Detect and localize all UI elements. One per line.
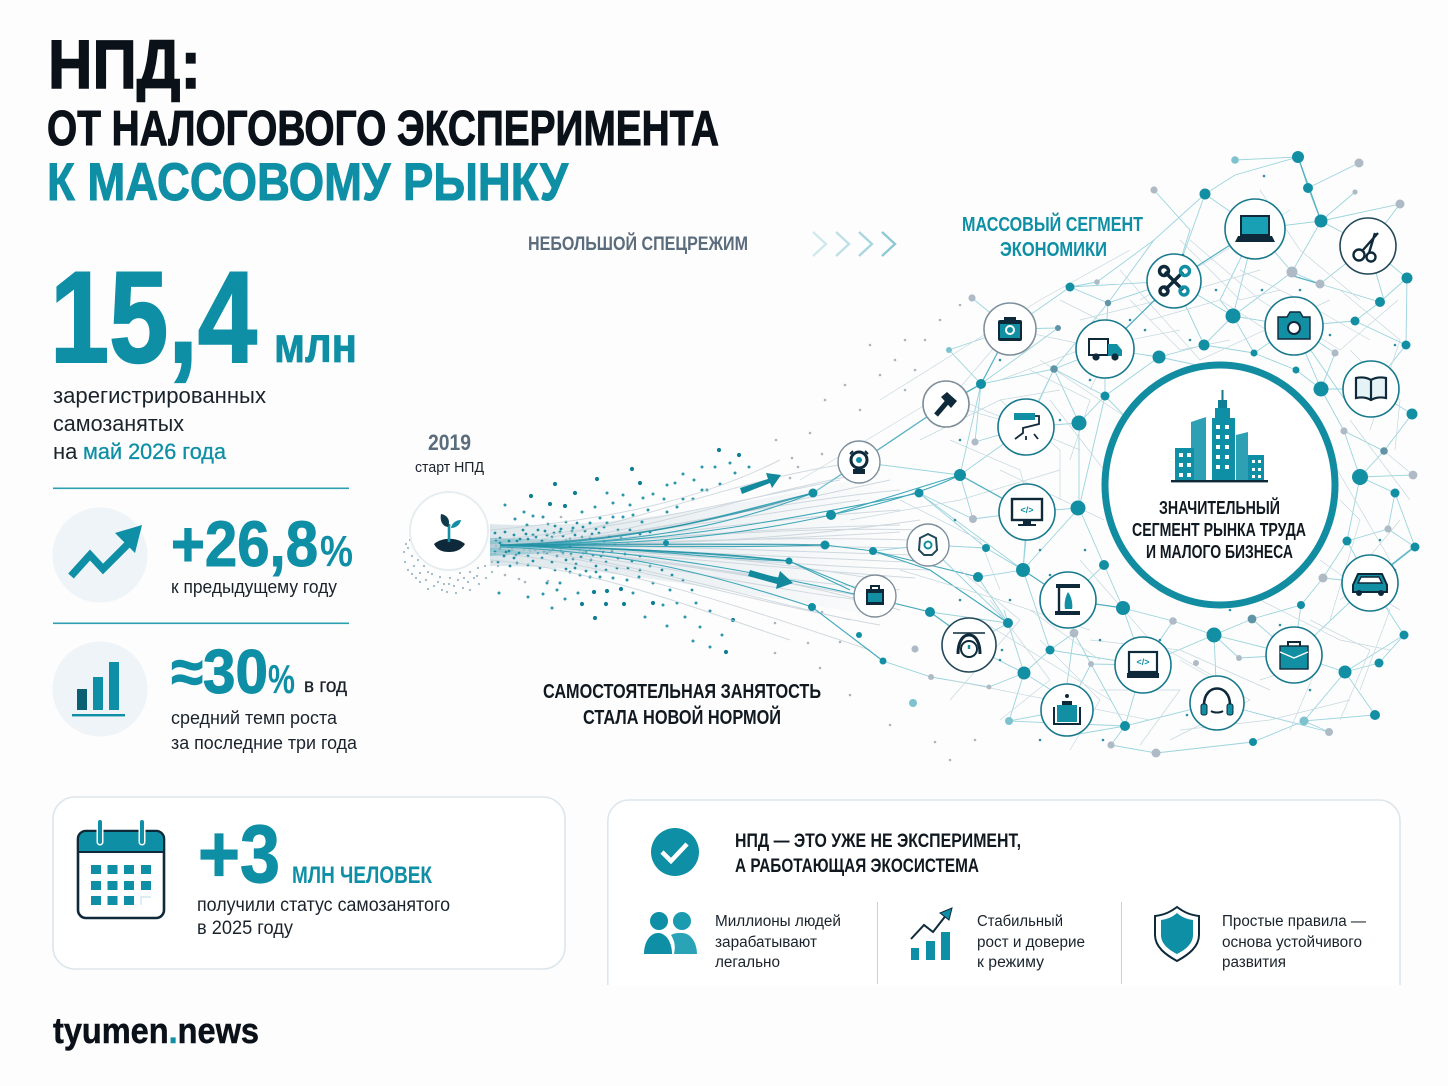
caption: self-employment new norm [543, 680, 821, 729]
big stat 15,4 mln: зарегистрированных [53, 383, 266, 408]
icon: car [1342, 555, 1398, 611]
panel: +3 million: +3 [198, 809, 280, 900]
stat: +26,8%: % [320, 527, 353, 576]
flow arrows [740, 473, 793, 589]
panel: ecosystem: Стабильный [977, 913, 1063, 930]
network nodes [663, 151, 1420, 758]
icon: printer press [1040, 572, 1096, 628]
icon: old camera [984, 303, 1036, 355]
flow: particles from start point [404, 305, 975, 760]
panel: ecosystem: основа устойчивого [1222, 934, 1362, 951]
panel: ecosystem [608, 800, 1400, 985]
big stat 15,4 mln: май 2026 года [83, 439, 227, 464]
icon: monitor code [999, 484, 1055, 540]
stat: approx 30%: ≈30 [171, 638, 268, 707]
icon: wrench [1147, 254, 1201, 308]
stat: approx 30%: % [268, 656, 295, 702]
caption: self-employment new norm: САМОСТОЯТЕЛЬНАЯ ЗАНЯТОСТЬ [543, 680, 821, 703]
stat: +26,8% [52, 508, 353, 602]
big stat 15,4 mln: 15,4 [50, 244, 257, 390]
label: mass segment: МАССОВЫЙ СЕГМЕНТ [962, 212, 1143, 236]
icon: paint roller [998, 399, 1054, 455]
panel: ecosystem: НПД — ЭТО УЖЕ НЕ ЭКСПЕРИМЕНТ, [735, 831, 1021, 852]
chevron arrows [813, 232, 895, 256]
center circle: labor market: И МАЛОГО БИЗНЕСА [1146, 542, 1293, 562]
panel: ecosystem: А РАБОТАЮЩАЯ ЭКОСИСТЕМА [735, 856, 979, 877]
icon: truck [1076, 320, 1134, 378]
title [47, 26, 719, 212]
stat: +26,8%: к предыдущему году [171, 576, 338, 597]
icon: camera [1265, 297, 1323, 355]
stat: approx 30% [52, 638, 358, 753]
stat: approx 30%: в год [304, 676, 347, 697]
icon: small bag [854, 575, 896, 617]
icon: laptop code [1115, 637, 1171, 693]
label: mass segment: ЭКОНОМИКИ [1000, 238, 1107, 261]
start point: 2019: старт НПД [415, 459, 484, 476]
panel: +3 million: получили статус самозанятого [197, 895, 450, 916]
label: mass segment [962, 212, 1143, 261]
big stat 15,4 mln: на [53, 439, 78, 464]
panel: ecosystem: к режиму [977, 954, 1044, 971]
title: ОТ НАЛОГОВОГО ЭКСПЕРИМЕНТА [47, 102, 719, 156]
icon: book [1343, 361, 1399, 417]
start point: 2019: 2019 [428, 430, 471, 455]
big stat 15,4 mln: самозанятых [53, 411, 184, 436]
panel: ecosystem: развития [1222, 954, 1286, 971]
stat: approx 30%: за последние три года [171, 732, 358, 753]
network of connections [800, 157, 1415, 753]
panel: ecosystem: зарабатывают [715, 934, 817, 951]
icon: shield [1155, 907, 1199, 961]
big stat 15,4 mln [50, 244, 357, 464]
panel: +3 million: в 2025 году [197, 918, 293, 939]
stat: approx 30%: средний темп роста [171, 707, 338, 728]
icon: laptop [1225, 199, 1285, 259]
flow: stream lines [490, 460, 1008, 661]
panel: ecosystem: Простые правила — [1222, 913, 1366, 930]
center circle: labor market: СЕГМЕНТ РЫНКА ТРУДА [1132, 520, 1306, 540]
icon: gear badge [907, 524, 949, 566]
center circle: labor market: ЗНАЧИТЕЛЬНЫЙ [1159, 497, 1280, 518]
label: small special regime: НЕБОЛЬШОЙ СПЕЦРЕЖИМ [528, 231, 748, 255]
title: НПД: [48, 26, 201, 103]
panel: ecosystem: легально [715, 954, 780, 971]
icon: calendar [78, 822, 164, 918]
icon: ship [1041, 684, 1093, 736]
icon: sprout [434, 514, 465, 552]
panel: +3 million: МЛН ЧЕЛОВЕК [292, 862, 432, 889]
icon: growth [911, 908, 952, 960]
title: К МАССОВОМУ РЫНКУ [47, 153, 569, 212]
icon: laptop code: </> [1136, 657, 1150, 667]
panel: +3 million [53, 797, 565, 969]
panel: ecosystem: Миллионы людей [715, 913, 841, 930]
caption: self-employment new norm: СТАЛА НОВОЙ НОРМОЙ [583, 705, 781, 729]
logo: tyumen.news [53, 1010, 259, 1051]
icon: headset [1190, 676, 1244, 730]
center circle: labor market [1105, 365, 1335, 605]
icon: briefcase [1266, 627, 1322, 683]
big stat 15,4 mln: млн [274, 317, 357, 373]
icon: compass tool [942, 618, 996, 672]
icon: scissors [1340, 218, 1396, 274]
icon: alarm clock [838, 441, 880, 483]
icon: hammer [923, 381, 969, 427]
stat: +26,8%: +26,8 [171, 508, 318, 580]
icon: city [1171, 390, 1268, 482]
icon: check [651, 828, 699, 876]
icon: people [644, 912, 697, 954]
panel: ecosystem: рост и доверие [977, 934, 1085, 951]
start point: 2019 [410, 430, 488, 570]
icon: monitor code: </> [1020, 505, 1034, 515]
